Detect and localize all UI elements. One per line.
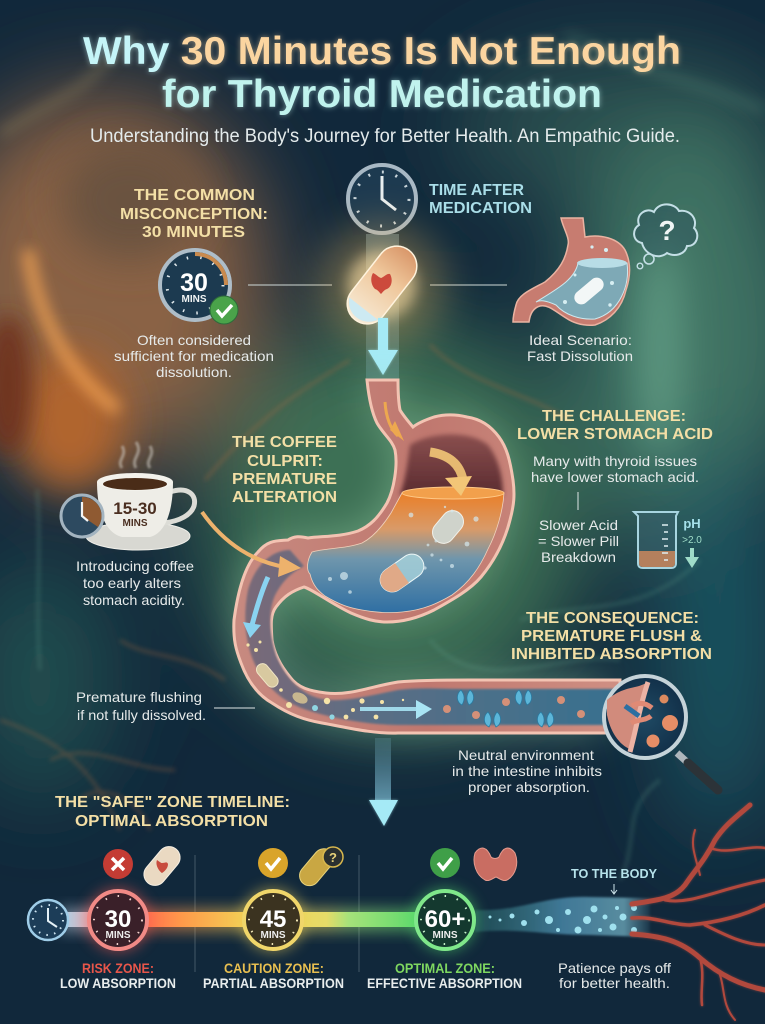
optimal timer: 60+ — [425, 906, 465, 933]
icon: thyroid gland — [474, 848, 517, 881]
heading: coffee culprit: THE COFFEE — [232, 434, 337, 451]
heading: safe zone timeline: OPTIMAL ABSORPTION — [75, 813, 268, 830]
label: pH above 2.0: >2.0 — [682, 535, 702, 546]
icon: thought bubble — [634, 204, 697, 269]
panel: common misconception — [114, 187, 274, 380]
title: for Thyroid Medication — [162, 73, 602, 116]
text: misconception description — [114, 332, 274, 380]
heading: misconception: 30 MINUTES — [142, 224, 245, 241]
label: risk zone: LOW ABSORPTION — [60, 975, 176, 991]
timeline bar glow — [60, 908, 430, 932]
stomach upper interior — [400, 434, 503, 495]
icon: red cross — [103, 849, 133, 879]
heading: misconception: THE COMMON — [134, 187, 255, 204]
icon: caution pill with question: ? — [329, 850, 337, 865]
arrow: flow into duodenum — [243, 577, 268, 638]
label: time after medication: TIME AFTER — [429, 182, 524, 199]
pill dissolving upper — [428, 506, 468, 548]
panel: coffee culprit — [61, 434, 337, 608]
panel: timeline — [28, 805, 765, 1020]
text: neutral environment: in the intestine inhibits — [452, 763, 602, 779]
icon: caution pill with question — [295, 845, 343, 890]
right shoulder line — [565, 35, 765, 110]
label: time after medication: MEDICATION — [429, 200, 532, 217]
risk timer — [86, 888, 150, 952]
icon: time clock — [348, 165, 416, 233]
text: slower acid: Breakdown — [541, 549, 616, 565]
text: premature flushing: if not fully dissolved. — [77, 707, 206, 723]
dark red-brown flank — [0, 315, 32, 455]
subtitle: Understanding the Body's Journey for Better Health. An Empathic Guide. — [90, 126, 680, 147]
panel: main stomach and intestine — [234, 380, 718, 790]
label: caution zone — [203, 960, 344, 991]
bubbles — [328, 506, 479, 594]
label: caution zone: CAUTION ZONE: — [224, 960, 324, 976]
arrow: pill down to stomach — [368, 318, 398, 375]
label: optimal zone — [367, 960, 522, 991]
timeline bar — [60, 912, 430, 927]
text: challenge description: Many with thyroid issues — [533, 453, 697, 469]
icon: green check — [430, 848, 460, 878]
heading: consequence: INHIBITED ABSORPTION — [511, 646, 712, 663]
icon: 30 minute clock: 30 — [180, 269, 208, 297]
heading: safe zone timeline: THE "SAFE" ZONE TIMELINE: — [55, 794, 290, 811]
arrow: through intestine — [360, 700, 432, 719]
text: slower acid: Slower Acid — [539, 517, 618, 533]
duodenum and intestine lumen — [245, 550, 620, 725]
caution timer: MINS — [260, 930, 286, 941]
text: coffee description — [76, 558, 194, 608]
vessels to the body — [632, 805, 765, 1020]
heading: consequence: PREMATURE FLUSH & — [521, 628, 702, 645]
label: pH above 2.0 — [682, 516, 702, 568]
risk timer: MINS — [106, 930, 131, 941]
arrow: coffee into stomach — [202, 512, 301, 577]
text: patience pays off: for better health. — [559, 975, 670, 991]
text: coffee description: too early alters — [83, 575, 181, 591]
arrow head: esophagus — [390, 421, 404, 441]
panel: the consequence — [452, 610, 712, 795]
panel: ideal scenario — [513, 204, 697, 364]
label: to the body: TO THE BODY — [571, 866, 657, 881]
absorption particles — [443, 696, 585, 719]
icon: thought bubble: ? — [658, 215, 676, 246]
icon: coffee cup with timer: 15-30 — [113, 499, 157, 518]
heading: challenge: LOWER STOMACH ACID — [517, 426, 713, 443]
text: ideal scenario: Fast Dissolution — [527, 348, 633, 364]
title: Why 30 Minutes Is Not Enough — [83, 30, 681, 73]
text: ideal scenario: Ideal Scenario: — [529, 332, 632, 348]
icon: coffee cup with timer: MINS — [122, 518, 148, 529]
heading: coffee culprit: ALTERATION — [232, 489, 337, 506]
text: neutral environment: Neutral environment — [458, 747, 594, 763]
heading: safe zone timeline — [55, 794, 290, 830]
particles in intestine — [246, 640, 404, 720]
heading: consequence: THE CONSEQUENCE: — [526, 610, 699, 627]
heading: challenge — [517, 408, 713, 443]
body stream — [475, 897, 650, 937]
left shoulder line — [0, 36, 135, 134]
arrow: esophagus — [385, 402, 398, 436]
panel: the challenge — [517, 408, 713, 568]
vertical time beam — [366, 234, 399, 380]
icon: 30 minute clock — [160, 250, 238, 324]
icon: yellow check — [258, 848, 288, 878]
icon: 30 minute clock: MINS — [182, 294, 207, 305]
label: pH above 2.0: pH — [683, 516, 701, 531]
text: patience pays off — [558, 960, 671, 991]
icon: small stomach with water — [513, 218, 630, 325]
icon: risk pill — [139, 842, 185, 890]
text: neutral environment — [452, 747, 602, 795]
pill dissolving lower — [375, 549, 429, 597]
arrow: into stomach liquid — [430, 452, 472, 496]
text: premature flushing — [76, 689, 206, 723]
text: challenge description — [531, 453, 699, 485]
text: neutral environment: proper absorption. — [468, 779, 590, 795]
text: patience pays off: Patience pays off — [558, 960, 671, 976]
caution timer — [241, 888, 305, 952]
optimal timer: MINS — [432, 930, 458, 941]
optimal timer — [413, 888, 477, 952]
heading: challenge: THE CHALLENGE: — [542, 408, 686, 425]
liquid surface — [402, 487, 504, 499]
label: risk zone — [60, 960, 176, 991]
caution timer: 45 — [260, 906, 286, 933]
icon: start clock — [28, 900, 68, 940]
intestinal valves — [457, 690, 554, 727]
stomach liquid — [308, 493, 504, 613]
heading: coffee culprit: PREMATURE — [232, 471, 337, 488]
label: optimal zone: OPTIMAL ZONE: — [395, 960, 495, 976]
heading: misconception — [120, 187, 268, 241]
pill fragment — [254, 661, 281, 690]
icon: glowing thyroid pill — [320, 223, 444, 347]
text: slower acid: = Slower Pill — [538, 533, 619, 549]
risk timer: 30 — [105, 906, 131, 933]
stomach glow — [234, 380, 604, 733]
icon: steam — [120, 442, 152, 468]
label: optimal zone: EFFECTIVE ABSORPTION — [367, 975, 522, 991]
heading: coffee culprit: CULPRIT: — [247, 453, 323, 470]
orange flank highlight — [28, 250, 118, 410]
heading: misconception: MISCONCEPTION: — [120, 206, 268, 223]
label: risk zone: RISK ZONE: — [82, 960, 154, 976]
heading: consequence — [511, 610, 712, 663]
icon: coffee cup with timer — [61, 473, 195, 550]
text: slower acid — [538, 517, 619, 565]
icon: beaker — [634, 512, 678, 568]
label: to the body — [571, 866, 657, 894]
label: caution zone: PARTIAL ABSORPTION — [203, 975, 344, 991]
text: coffee description: stomach acidity. — [83, 592, 185, 608]
stomach and intestine wall — [234, 380, 620, 733]
icon: magnifying glass — [604, 676, 718, 790]
text: misconception description: sufficient for medication — [114, 348, 274, 364]
heading: coffee culprit — [232, 434, 337, 506]
text: challenge description: have lower stomach acid. — [531, 469, 699, 485]
text: misconception description: Often considered — [137, 332, 251, 348]
arrow: down to timeline — [369, 738, 398, 826]
text: premature flushing: Premature flushing — [76, 689, 202, 705]
title — [83, 30, 681, 116]
text: ideal scenario — [527, 332, 633, 364]
label: time after medication — [429, 182, 532, 217]
text: misconception description: dissolution. — [156, 364, 232, 380]
text: coffee description: Introducing coffee — [76, 558, 194, 574]
pill fragment lower — [291, 690, 309, 706]
